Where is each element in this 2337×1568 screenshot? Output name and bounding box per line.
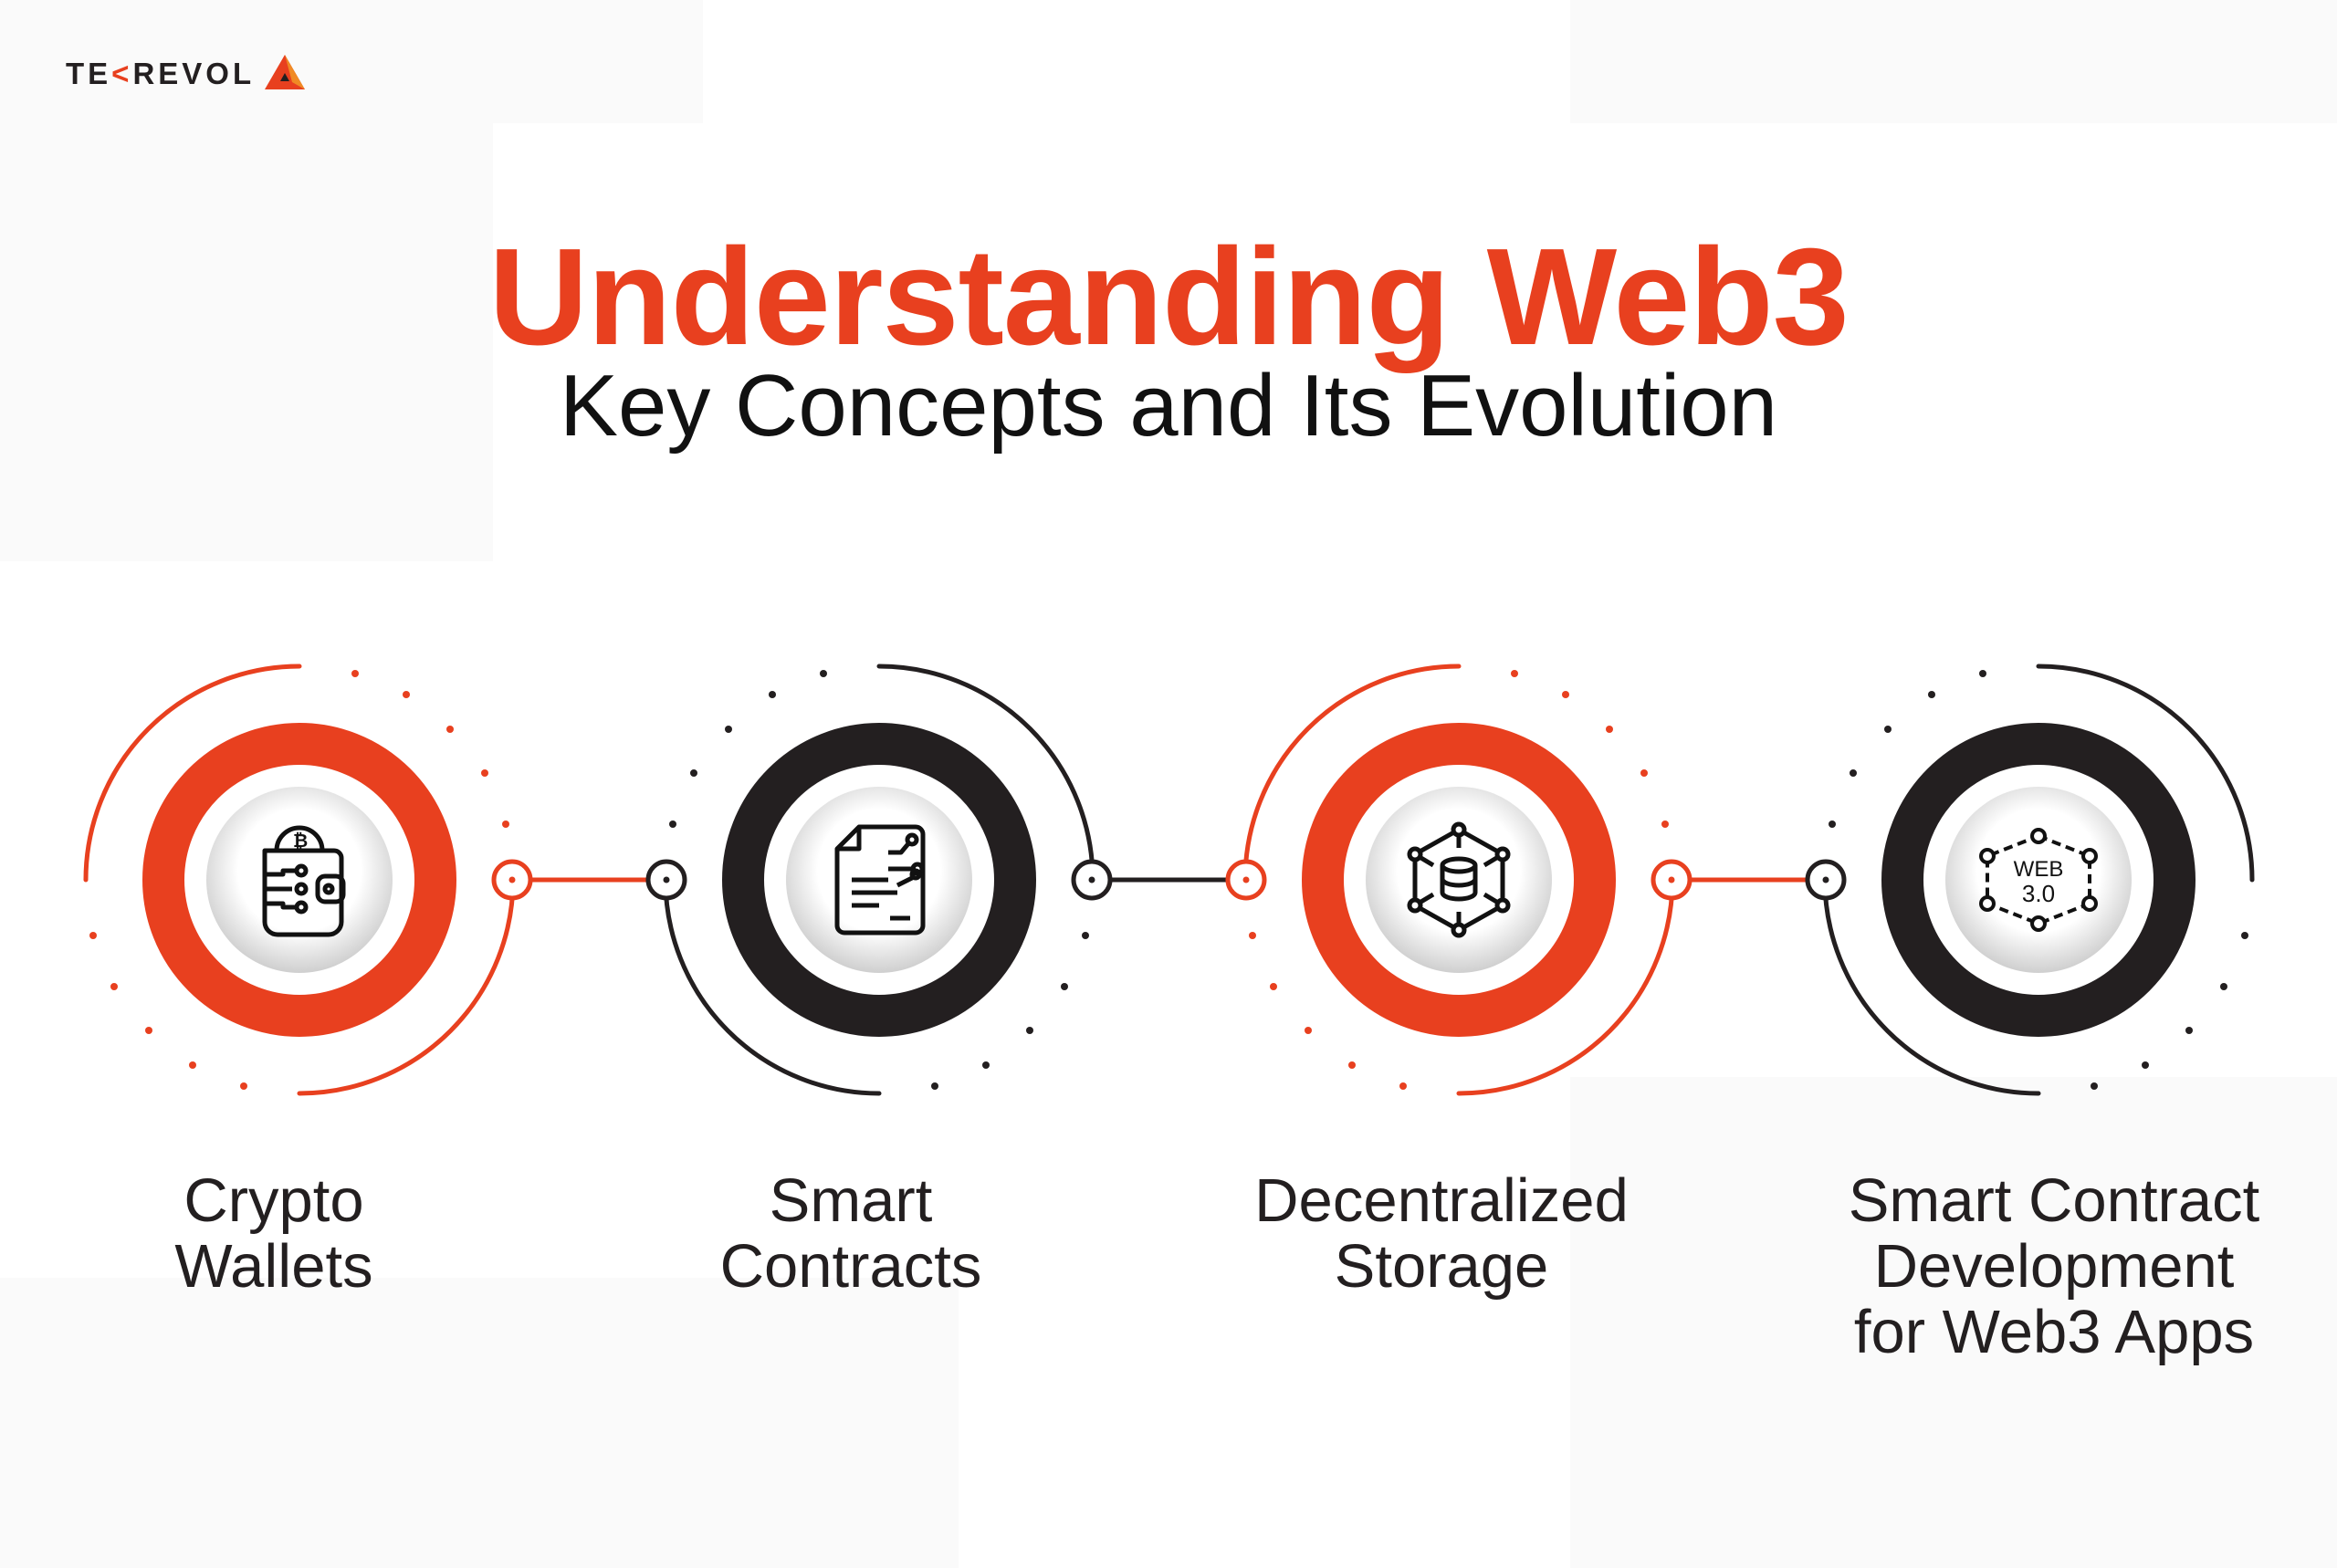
label: smart contracts [720, 1166, 981, 1301]
label: crypto wallets: Wallets [174, 1232, 373, 1301]
icon: crypto wallet: ₿ [293, 831, 308, 852]
step 3: decentralized storage ring [1228, 666, 1690, 1093]
icon: smart contract document [837, 827, 923, 933]
title: Understanding Web3 [488, 219, 1849, 373]
label: smart contracts: Smart [770, 1166, 932, 1235]
label: decentralized storage: Decentralized [1254, 1166, 1629, 1235]
label: crypto wallets: Crypto [183, 1166, 364, 1235]
logo text: TE<REVOL [66, 57, 255, 90]
label: smart contract development: Development [1874, 1232, 2234, 1301]
logo [66, 55, 305, 90]
step 1: crypto wallets ring [86, 666, 530, 1093]
connector lines [512, 878, 1825, 882]
icon: crypto wallet [265, 828, 343, 935]
label: decentralized storage [1254, 1166, 1629, 1301]
icon: web 3.0: 3.0 [2022, 880, 2055, 907]
label: decentralized storage: Storage [1335, 1232, 1548, 1301]
label: crypto wallets [174, 1166, 373, 1301]
label: smart contract development: for Web3 Apps [1854, 1298, 2254, 1366]
logo triangle [265, 55, 305, 89]
subtitle: Key Concepts and Its Evolution [560, 357, 1777, 455]
icon: decentralized storage network [1410, 824, 1508, 936]
label: smart contract development [1849, 1166, 2259, 1366]
step 2: smart contracts ring [648, 666, 1110, 1093]
icon: web 3.0: WEB [2014, 857, 2063, 882]
label: smart contracts: Contracts [720, 1232, 981, 1301]
icon: web 3.0 [1981, 830, 2096, 930]
label: smart contract development: Smart Contract [1849, 1166, 2259, 1235]
step 4: web3 apps ring [1808, 666, 2252, 1093]
